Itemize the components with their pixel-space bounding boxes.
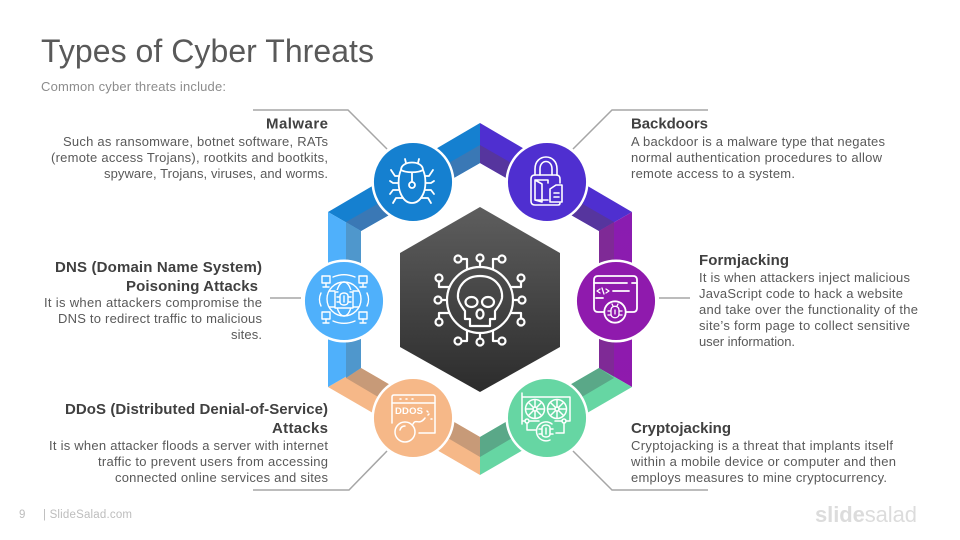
panel: backdoors: A backdoor is a malware type that negates (631, 134, 886, 149)
panel: cryptojacking: Cryptojacking is a threat that implants itself (631, 438, 893, 453)
hexagon ring (328, 123, 632, 475)
central hexagon with skull icon (400, 207, 560, 392)
panel: malware: Malware (266, 116, 328, 132)
panel: formjacking: user information. (699, 334, 795, 349)
panel: backdoors: Backdoors (631, 116, 708, 132)
panel: formjacking: JavaScript code to hack a website (699, 286, 903, 301)
panel: formjacking: It is when attackers inject malicious (699, 270, 910, 285)
panel: ddos: It is when attacker floods a server with internet (49, 438, 328, 453)
logo wordmark: slidesalad (815, 502, 917, 527)
panel: backdoors (507, 110, 886, 222)
panel: dns poisoning (44, 259, 384, 342)
icon: ddos window with bomb: DDOS (395, 406, 423, 417)
icon: padlock with door (507, 142, 587, 222)
panel: cryptojacking: employs measures to mine cryptocurrency. (631, 470, 887, 485)
panel: ddos: connected online services and sites (115, 470, 328, 485)
icon: bug (373, 142, 453, 222)
panel: formjacking (576, 252, 918, 349)
panel: cryptojacking: within a mobile device or computer and then (630, 454, 896, 469)
page number: 9 (19, 509, 25, 521)
icon: ddos window with bomb (373, 378, 453, 458)
panel: dns poisoning: It is when attackers compromise the (44, 295, 262, 310)
panel: backdoors: normal authentication procedures to allow (631, 150, 883, 165)
panel: backdoors: remote access to a system. (631, 166, 795, 181)
panel: cryptojacking: Cryptojacking (631, 420, 731, 437)
title: Types of Cyber Threats (41, 33, 374, 69)
panel: formjacking: site’s form page to collect sensitive (699, 318, 910, 333)
panel: dns poisoning: sites. (231, 327, 262, 342)
footer brand text: | SlideSalad.com (43, 509, 132, 521)
panel: malware: spyware, Trojans, viruses, and worms. (104, 166, 328, 181)
panel: malware: Such as ransomware, botnet software, RATs (63, 134, 328, 149)
panel: formjacking: and take over the functionality of the (699, 302, 918, 317)
panel: ddos: DDoS (Distributed Denial-of-Service) (65, 401, 328, 418)
icon: code window with bug (576, 261, 656, 341)
panel: dns poisoning: DNS to redirect traffic to malicious (58, 311, 262, 326)
panel: ddos (49, 378, 453, 490)
subtitle: Common cyber threats include: (41, 79, 226, 94)
panel: malware (51, 110, 453, 222)
panel: malware: (remote access Trojans), rootkits and bootkits, (51, 150, 328, 165)
icon: globe with network (304, 261, 384, 341)
panel: dns poisoning: Poisoning Attacks (126, 278, 258, 295)
panel: ddos: Attacks (272, 420, 328, 437)
icon: mining graphics card (507, 378, 587, 458)
panel: formjacking: Formjacking (699, 252, 789, 269)
panel: dns poisoning: DNS (Domain Name System) (55, 259, 262, 276)
panel: cryptojacking (507, 378, 896, 490)
panel: ddos: traffic to prevent users from accessing (98, 454, 328, 469)
